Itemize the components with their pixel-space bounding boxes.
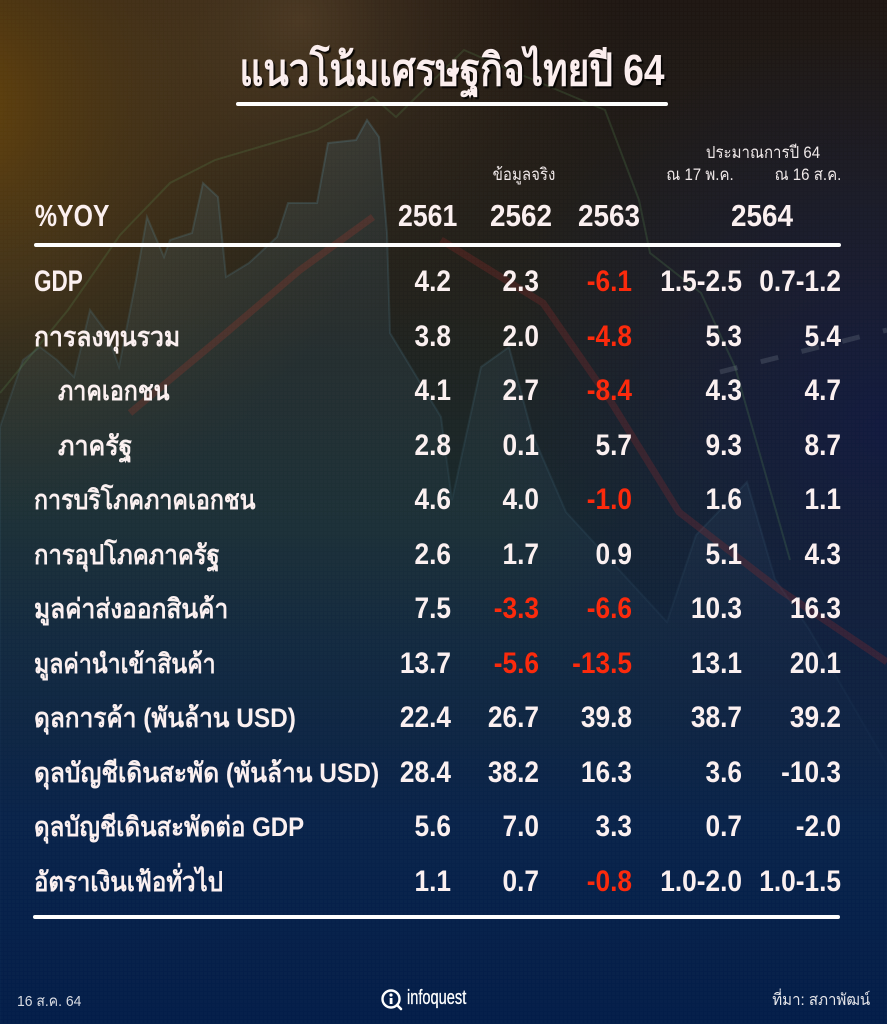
row: current account to GDP (34, 810, 841, 844)
header rule (34, 243, 841, 247)
footer: source: ที่มา: สภาพัฒน์ (772, 992, 870, 1009)
column group label: actual data: ข้อมูลจริง (493, 165, 555, 184)
bottom rule (33, 915, 840, 919)
row: public sector: ภาครัฐ (58, 431, 132, 461)
row: headline inflation: 1.0-2.0 (660, 865, 742, 898)
row: trade balance (34, 701, 841, 735)
footer: date: 16 ส.ค. 64 (17, 993, 81, 1010)
row: current account to GDP: 0.7 (705, 810, 742, 843)
row: private consumption: การบริโภคภาคเอกชน (34, 485, 256, 515)
row: current account: -10.3 (781, 756, 841, 789)
row: import value: 20.1 (790, 647, 841, 680)
title underline (236, 102, 668, 106)
table header row (35, 198, 793, 233)
row: private consumption: 4.0 (502, 483, 539, 516)
row: private sector: ภาคเอกชน (58, 376, 169, 406)
row: current account: 38.2 (488, 756, 539, 789)
row: export value: -6.6 (587, 592, 632, 625)
row: GDP: -6.1 (587, 265, 632, 298)
row: export value: 10.3 (691, 592, 742, 625)
row: current account: 16.3 (581, 756, 632, 789)
table header row: 2562 (490, 198, 552, 233)
row: current account to GDP: ดุลบัญชีเดินสะพัดต่อ GDP (34, 812, 304, 842)
row: public sector (58, 429, 841, 464)
row: current account: 3.6 (705, 756, 742, 789)
row: headline inflation: -0.8 (587, 865, 632, 898)
row: trade balance: 39.2 (790, 701, 841, 734)
row: private sector: 4.7 (804, 374, 841, 407)
row: private sector: 2.7 (502, 374, 539, 407)
row: public sector: 5.7 (595, 429, 632, 462)
row: import value: 13.1 (691, 647, 742, 680)
row: import value: 13.7 (400, 647, 451, 680)
column label: forecast 16 Aug: ณ 16 ส.ค. (775, 165, 841, 184)
row: total investment: การลงทุนรวม (34, 322, 180, 352)
row: private sector (58, 374, 841, 407)
row: GDP: 2.3 (502, 265, 539, 298)
row: total investment: 2.0 (502, 320, 539, 353)
row: headline inflation: 0.7 (502, 865, 539, 898)
row: current account to GDP: 7.0 (502, 810, 539, 843)
row: import value (34, 647, 841, 680)
row: current account to GDP: 5.6 (414, 810, 451, 843)
row: public consumption: 0.9 (595, 538, 632, 571)
row: private consumption: 1.6 (705, 483, 742, 516)
row: public sector: 9.3 (705, 429, 742, 462)
row: public consumption: 2.6 (414, 538, 451, 571)
row: current account: 28.4 (400, 756, 451, 789)
footer: infoquest logo (381, 987, 466, 1010)
row: export value: -3.3 (494, 592, 539, 625)
row: GDP (34, 265, 841, 298)
row: total investment: 3.8 (414, 320, 451, 353)
row: trade balance: 22.4 (400, 701, 451, 734)
row: total investment: 5.4 (804, 320, 841, 353)
row: total investment: 5.3 (705, 320, 742, 353)
row: private sector: 4.1 (414, 374, 451, 407)
table header row: %YOY (35, 198, 109, 233)
row: trade balance: 38.7 (691, 701, 742, 734)
row: public consumption: 1.7 (502, 538, 539, 571)
table header row: 2564 (731, 198, 793, 233)
row: private consumption (34, 483, 841, 516)
row: trade balance: 39.8 (581, 701, 632, 734)
row: trade balance: ดุลการค้า (พันล้าน USD) (34, 703, 296, 733)
row: export value: 16.3 (790, 592, 841, 625)
title: แนวโน้มเศรษฐกิจไทยปี 64 (239, 46, 665, 95)
row: public sector: 8.7 (804, 429, 841, 462)
row: GDP: 0.7-1.2 (759, 265, 841, 298)
column label: forecast 17 May: ณ 17 พ.ค. (666, 165, 734, 184)
row: public consumption: การอุปโภคภาครัฐ (34, 540, 220, 570)
row: GDP: GDP (34, 265, 83, 298)
row: import value: -5.6 (494, 647, 539, 680)
row: export value (34, 592, 841, 626)
row: export value: 7.5 (414, 592, 451, 625)
row: current account (34, 756, 841, 790)
row: public consumption (34, 538, 841, 572)
row: private consumption: 1.1 (804, 483, 841, 516)
row: GDP: 4.2 (414, 265, 451, 298)
row: export value: มูลค่าส่งออกสินค้า (34, 594, 228, 624)
row: private consumption: -1.0 (587, 483, 632, 516)
row: headline inflation (34, 862, 841, 898)
row: public consumption: 4.3 (804, 538, 841, 571)
icon: magnifier with i (381, 989, 402, 1010)
row: total investment (34, 320, 841, 354)
row: import value: -13.5 (572, 647, 632, 680)
row: current account: ดุลบัญชีเดินสะพัด (พันล้าน USD) (34, 758, 379, 788)
column group label: 2564 forecast: ประมาณการปี 64 (706, 143, 820, 162)
row: import value: มูลค่านำเข้าสินค้า (34, 649, 216, 679)
row: private sector: -8.4 (587, 374, 632, 407)
row: total investment: -4.8 (587, 320, 632, 353)
table header row: 2563 (578, 198, 640, 233)
row: private sector: 4.3 (705, 374, 742, 407)
row: private consumption: 4.6 (414, 483, 451, 516)
table header row: 2561 (398, 198, 457, 233)
row: public sector: 0.1 (502, 429, 539, 462)
row: headline inflation: อัตราเงินเฟ้อทั่วไป (34, 867, 223, 897)
row: public sector: 2.8 (414, 429, 451, 462)
row: current account to GDP: -2.0 (796, 810, 841, 843)
row: public consumption: 5.1 (705, 538, 742, 571)
logo wordmark: infoquest (407, 987, 466, 1009)
row: headline inflation: 1.0-1.5 (759, 865, 841, 898)
row: current account to GDP: 3.3 (595, 810, 632, 843)
row: trade balance: 26.7 (488, 701, 539, 734)
row: headline inflation: 1.1 (414, 865, 451, 898)
row: GDP: 1.5-2.5 (660, 265, 742, 298)
